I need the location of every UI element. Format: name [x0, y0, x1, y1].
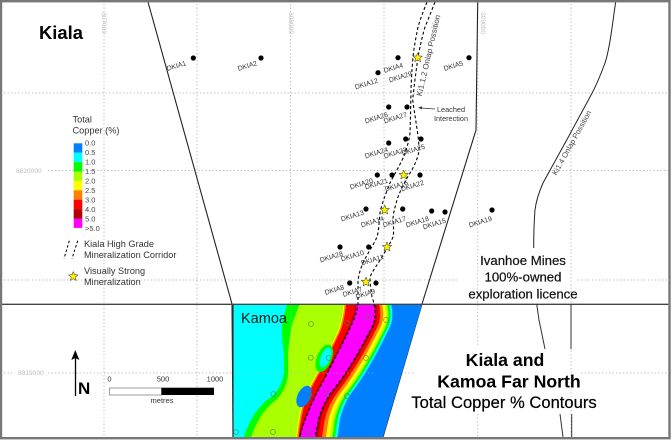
- drill holes and labels: DKIA26: [364, 112, 389, 125]
- main title: Total Copper % Contours: [411, 393, 597, 412]
- scale bar: 0: [107, 375, 112, 384]
- drill holes and labels: DKIA13: [340, 210, 365, 223]
- scale bar: 500: [157, 375, 169, 384]
- drill holes and labels: DKIA29: [388, 71, 413, 84]
- legend: total copper: 1.0: [85, 157, 95, 166]
- scale bar: metres: [151, 396, 174, 405]
- grid labels: 8820000: [16, 168, 42, 175]
- drill holes and labels: [166, 55, 495, 301]
- drill holes and labels: DKIA19: [468, 216, 493, 229]
- north arrow: N: [78, 379, 90, 398]
- legend: total copper: 4.0: [85, 205, 95, 214]
- Ki1.4 onlap label: Ki1.4 Onlap Possition: [550, 109, 593, 177]
- licence note: [468, 253, 578, 301]
- drill holes and labels: DKIA18: [405, 216, 430, 229]
- scale bar: [107, 375, 223, 405]
- legend: total copper: 2.5: [85, 186, 95, 195]
- main title: Kiala and: [466, 350, 544, 370]
- legend: visually strong mineralization: Visually Strong: [84, 266, 145, 276]
- Ki1.1.2 onlap label: Ki1.1.2 Onlap Possition: [415, 14, 442, 97]
- legend: corridor: Kiala High Grade: [84, 239, 154, 249]
- drill holes and labels: DKIA16: [384, 180, 409, 193]
- drill holes and labels: DKIA20: [349, 178, 374, 191]
- Kamoa border: [232, 304, 234, 437]
- grid labels: 8819000: [18, 370, 44, 377]
- drill holes and labels: DKIA8: [324, 284, 345, 297]
- section divider: [2, 303, 669, 305]
- drill holes and labels: DKIA28: [319, 251, 344, 264]
- legend: visually strong mineralization: [69, 266, 145, 287]
- north arrow: [71, 350, 90, 398]
- Kamoa copper contour map: [234, 305, 422, 437]
- title: Kiala: Kiala: [39, 22, 84, 43]
- Ki1.4 onlap line: [534, 2, 616, 248]
- legend: total copper: 0.0: [85, 138, 95, 147]
- legend: corridor: [64, 239, 176, 260]
- licence boundary lines: [148, 2, 478, 437]
- drill holes and labels: DKIA5: [443, 60, 464, 73]
- legend: total copper: [72, 115, 119, 233]
- mineralization stars: [361, 53, 422, 286]
- drill holes and labels: DKIA22: [400, 180, 425, 193]
- grid labels: 309000: [479, 12, 486, 34]
- legend: total copper: >5.0: [85, 224, 100, 233]
- drill holes and labels: DKIA7: [342, 286, 363, 299]
- drill holes and labels: DKIA10: [340, 250, 365, 263]
- legend: total copper: 0.5: [85, 148, 95, 157]
- drill holes and labels: DKIA15: [422, 218, 447, 231]
- drill holes and labels: DKIA21: [364, 178, 389, 191]
- leached interection callout: Interection: [434, 114, 468, 123]
- drill holes and labels: DKIA9: [355, 288, 376, 301]
- drill holes and labels: DKIA27: [383, 112, 408, 125]
- drill holes and labels: DKIA4: [383, 62, 404, 75]
- licence note: Ivanhoe Mines: [480, 253, 566, 268]
- drill holes and labels: DKIA14: [360, 216, 385, 229]
- grid labels: 308000: [287, 12, 294, 34]
- drill holes and labels: DKIA12: [354, 78, 379, 91]
- legend: total copper: 3.0: [85, 195, 95, 204]
- drill holes and labels: DKIA17: [382, 216, 407, 229]
- leached interection callout: [418, 105, 468, 123]
- drill holes and labels: DKIA2: [237, 60, 258, 73]
- legend: visually strong mineralization: Mineralization: [84, 277, 141, 287]
- legend: total copper: Copper (%): [72, 126, 119, 136]
- drill holes and labels: DKIA24: [364, 147, 389, 160]
- drill holes and labels: DKIA23: [383, 147, 408, 160]
- legend: total copper: Total: [72, 115, 92, 125]
- grid labels: 307000: [100, 12, 107, 34]
- legend: total copper: 1.5: [85, 167, 95, 176]
- drill holes and labels: DKIA25: [401, 144, 426, 157]
- drill holes and labels: DKIA11: [360, 254, 385, 267]
- main title: [411, 350, 597, 412]
- mineralization corridor dashed lines: [300, 2, 435, 437]
- grid labels: [16, 12, 486, 377]
- legend: total copper: 2.0: [85, 176, 95, 185]
- licence note: 100%-owned: [485, 270, 561, 285]
- main title: Kamoa Far North: [437, 372, 581, 392]
- legend: total copper: 5.0: [85, 214, 95, 223]
- drill holes and labels: DKIA1: [166, 60, 187, 73]
- Kamoa label: Kamoa: [241, 311, 288, 327]
- southern licence lines: [537, 304, 572, 437]
- legend: corridor: Mineralization Corridor: [84, 250, 176, 260]
- leached interection callout: Leached: [437, 105, 465, 114]
- licence note: exploration licence: [468, 286, 578, 301]
- scale bar: 1000: [207, 375, 223, 384]
